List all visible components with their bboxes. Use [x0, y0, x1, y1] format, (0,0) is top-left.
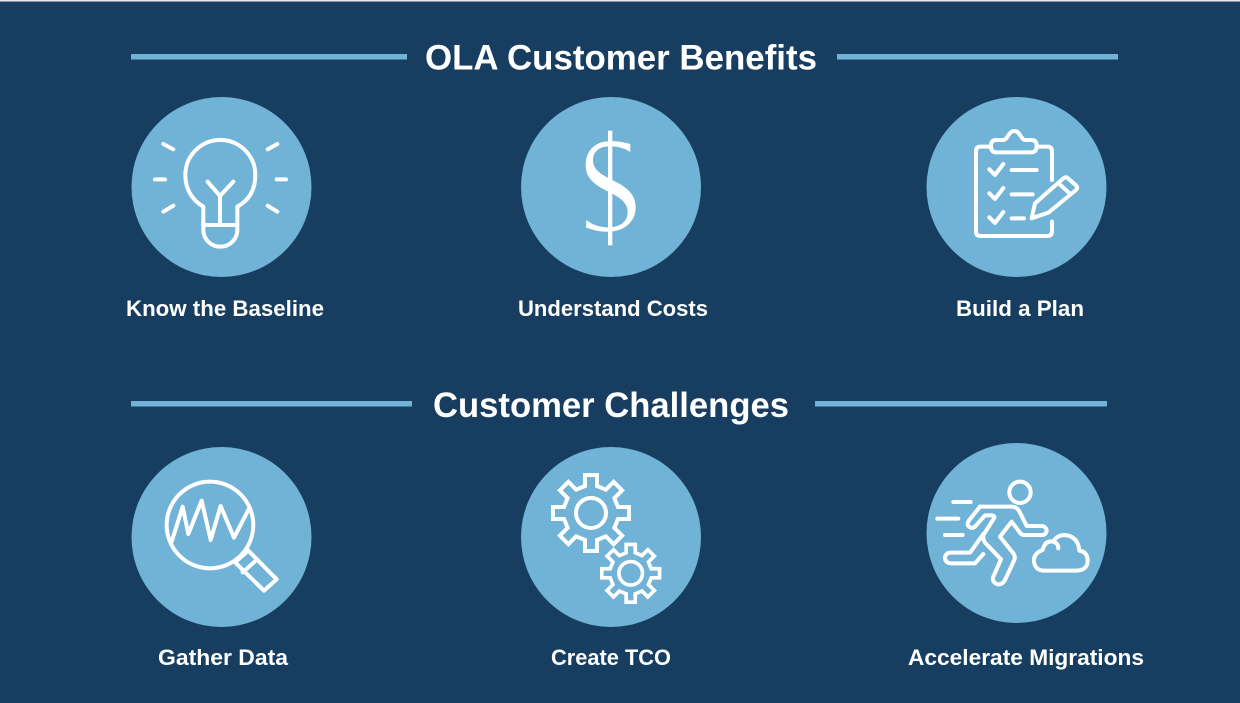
heading: Customer Challenges: Customer Challenges — [433, 386, 789, 425]
heading: OLA Customer Benefits: OLA Customer Benefits — [425, 38, 817, 78]
section: Customer Challenges — [131, 386, 1107, 425]
panel: Accelerate Migrations — [908, 443, 1144, 670]
label: Create TCO: Create TCO — [551, 645, 671, 670]
icon: light bulb — [155, 140, 286, 247]
label: Gather Data: Gather Data — [158, 645, 288, 670]
section: OLA Customer Benefits — [131, 38, 1118, 78]
icon: clipboard with pencil — [976, 131, 1077, 236]
label: Know the Baseline: Know the Baseline — [126, 296, 324, 321]
panel: Create TCO — [521, 447, 701, 670]
label: Build a Plan: Build a Plan — [956, 296, 1084, 321]
icon: gears — [553, 475, 660, 602]
label: Understand Costs: Understand Costs — [518, 296, 708, 321]
panel: Understand Costs — [518, 97, 708, 321]
panel: Gather Data — [132, 447, 312, 670]
icon: running figure with cloud — [937, 482, 1088, 584]
panel: Know the Baseline — [126, 97, 324, 321]
icon: dollar sign — [586, 131, 636, 245]
icon: magnifying glass with chart — [167, 482, 277, 591]
panel: Build a Plan — [926, 97, 1106, 321]
label: Accelerate Migrations: Accelerate Migrations — [908, 645, 1144, 670]
